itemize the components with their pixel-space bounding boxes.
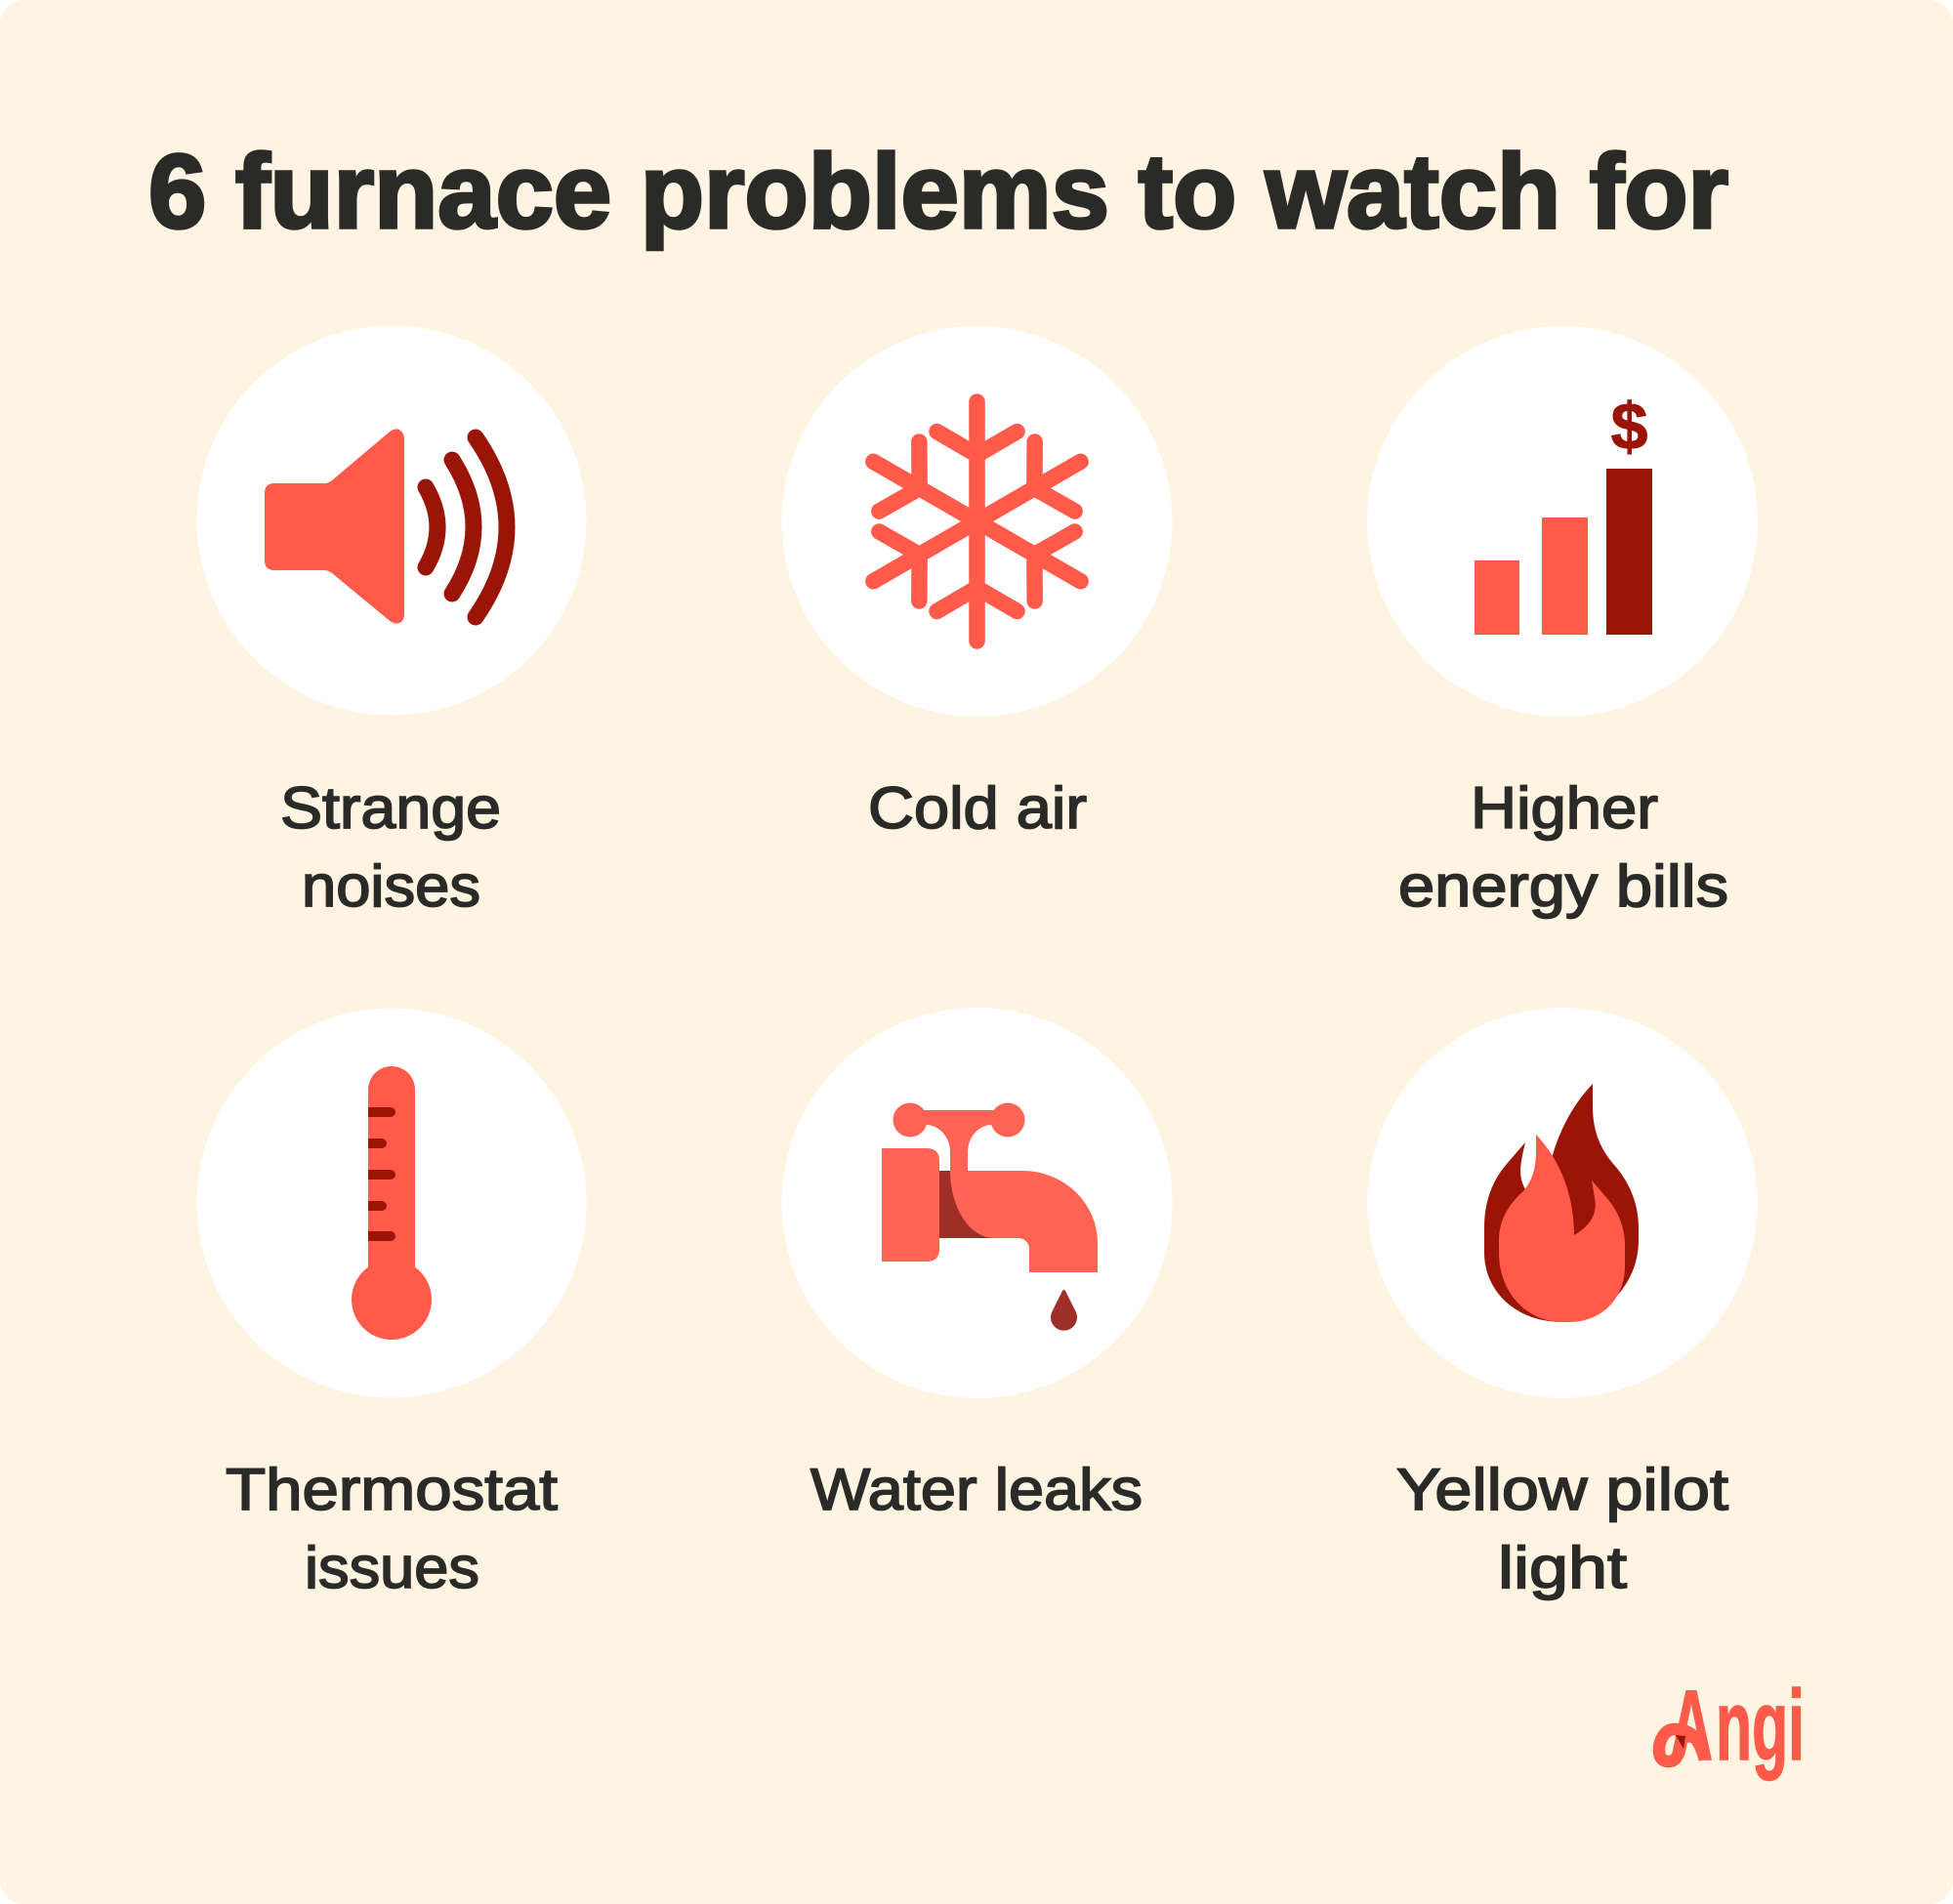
icon: snowflake <box>853 402 1101 641</box>
icon: thermometer <box>352 1066 432 1340</box>
icon: flame <box>1484 1084 1639 1322</box>
label: yellow pilot light <box>1396 1457 1728 1600</box>
label: yellow pilot light: light <box>1498 1535 1627 1600</box>
icon: dripping faucet <box>882 1103 1098 1331</box>
label: higher energy bills <box>1398 775 1728 919</box>
label: water leaks: Water leaks <box>810 1457 1143 1522</box>
icon: speaker <box>265 429 507 624</box>
icon circle <box>197 1008 586 1398</box>
logo: Angi: ngi <box>1716 1670 1805 1781</box>
label: cold air: Cold air <box>868 775 1087 841</box>
panel: water leaks <box>781 1008 1172 1522</box>
label: thermostat issues: issues <box>305 1535 479 1600</box>
panel: yellow pilot light <box>1367 1008 1758 1600</box>
label: strange noises: noises <box>302 853 480 919</box>
panel: cold air <box>781 326 1172 841</box>
icon circle <box>781 326 1172 717</box>
icon: rising bar chart with dollar sign <box>1475 390 1652 635</box>
panel: thermostat issues <box>197 1008 586 1600</box>
label: higher energy bills: energy bills <box>1398 853 1728 919</box>
title: 6 furnace problems to watch for <box>148 132 1728 250</box>
label: thermostat issues: Thermostat <box>226 1457 558 1522</box>
label: strange noises <box>280 775 501 919</box>
panel: strange noises <box>197 326 586 919</box>
icon circle <box>197 326 586 715</box>
label: thermostat issues <box>226 1457 558 1600</box>
icon: rising bar chart with dollar sign: $ <box>1611 390 1647 464</box>
label: yellow pilot light: Yellow pilot <box>1396 1457 1728 1522</box>
panel: higher energy bills <box>1367 326 1758 919</box>
icon circle <box>781 1008 1172 1398</box>
logo: Angi: A <box>1670 1670 1713 1781</box>
label: strange noises: Strange <box>280 775 501 841</box>
logo: Angi <box>1659 1670 1805 1781</box>
icon circle <box>1367 326 1758 717</box>
icon circle <box>1367 1008 1758 1398</box>
label: higher energy bills: Higher <box>1471 775 1658 841</box>
